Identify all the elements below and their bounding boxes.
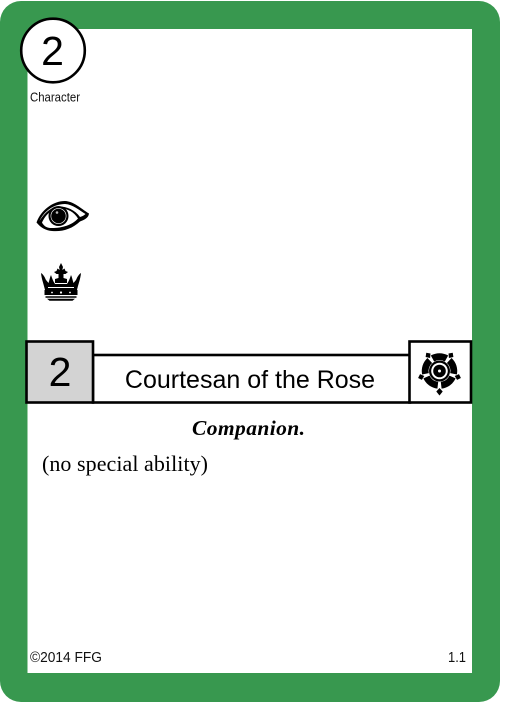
version number: 1.1 — [448, 650, 466, 666]
card type label: Character — [30, 90, 80, 104]
icon: eye — [36, 201, 89, 231]
icon: rose — [417, 351, 462, 396]
house box with rose icon — [410, 342, 471, 402]
cost circle — [21, 19, 85, 82]
traits: Companion. — [192, 416, 305, 440]
title bar — [93, 355, 410, 402]
title bar: Courtesan of the Rose — [125, 366, 375, 394]
cost circle: 2 — [41, 28, 64, 74]
icon: crown — [41, 263, 81, 301]
strength box — [26, 342, 93, 402]
strength box: 2 — [49, 349, 71, 395]
card text: (no special ability) — [42, 451, 208, 476]
copyright: ©2014 FFG — [30, 650, 102, 666]
